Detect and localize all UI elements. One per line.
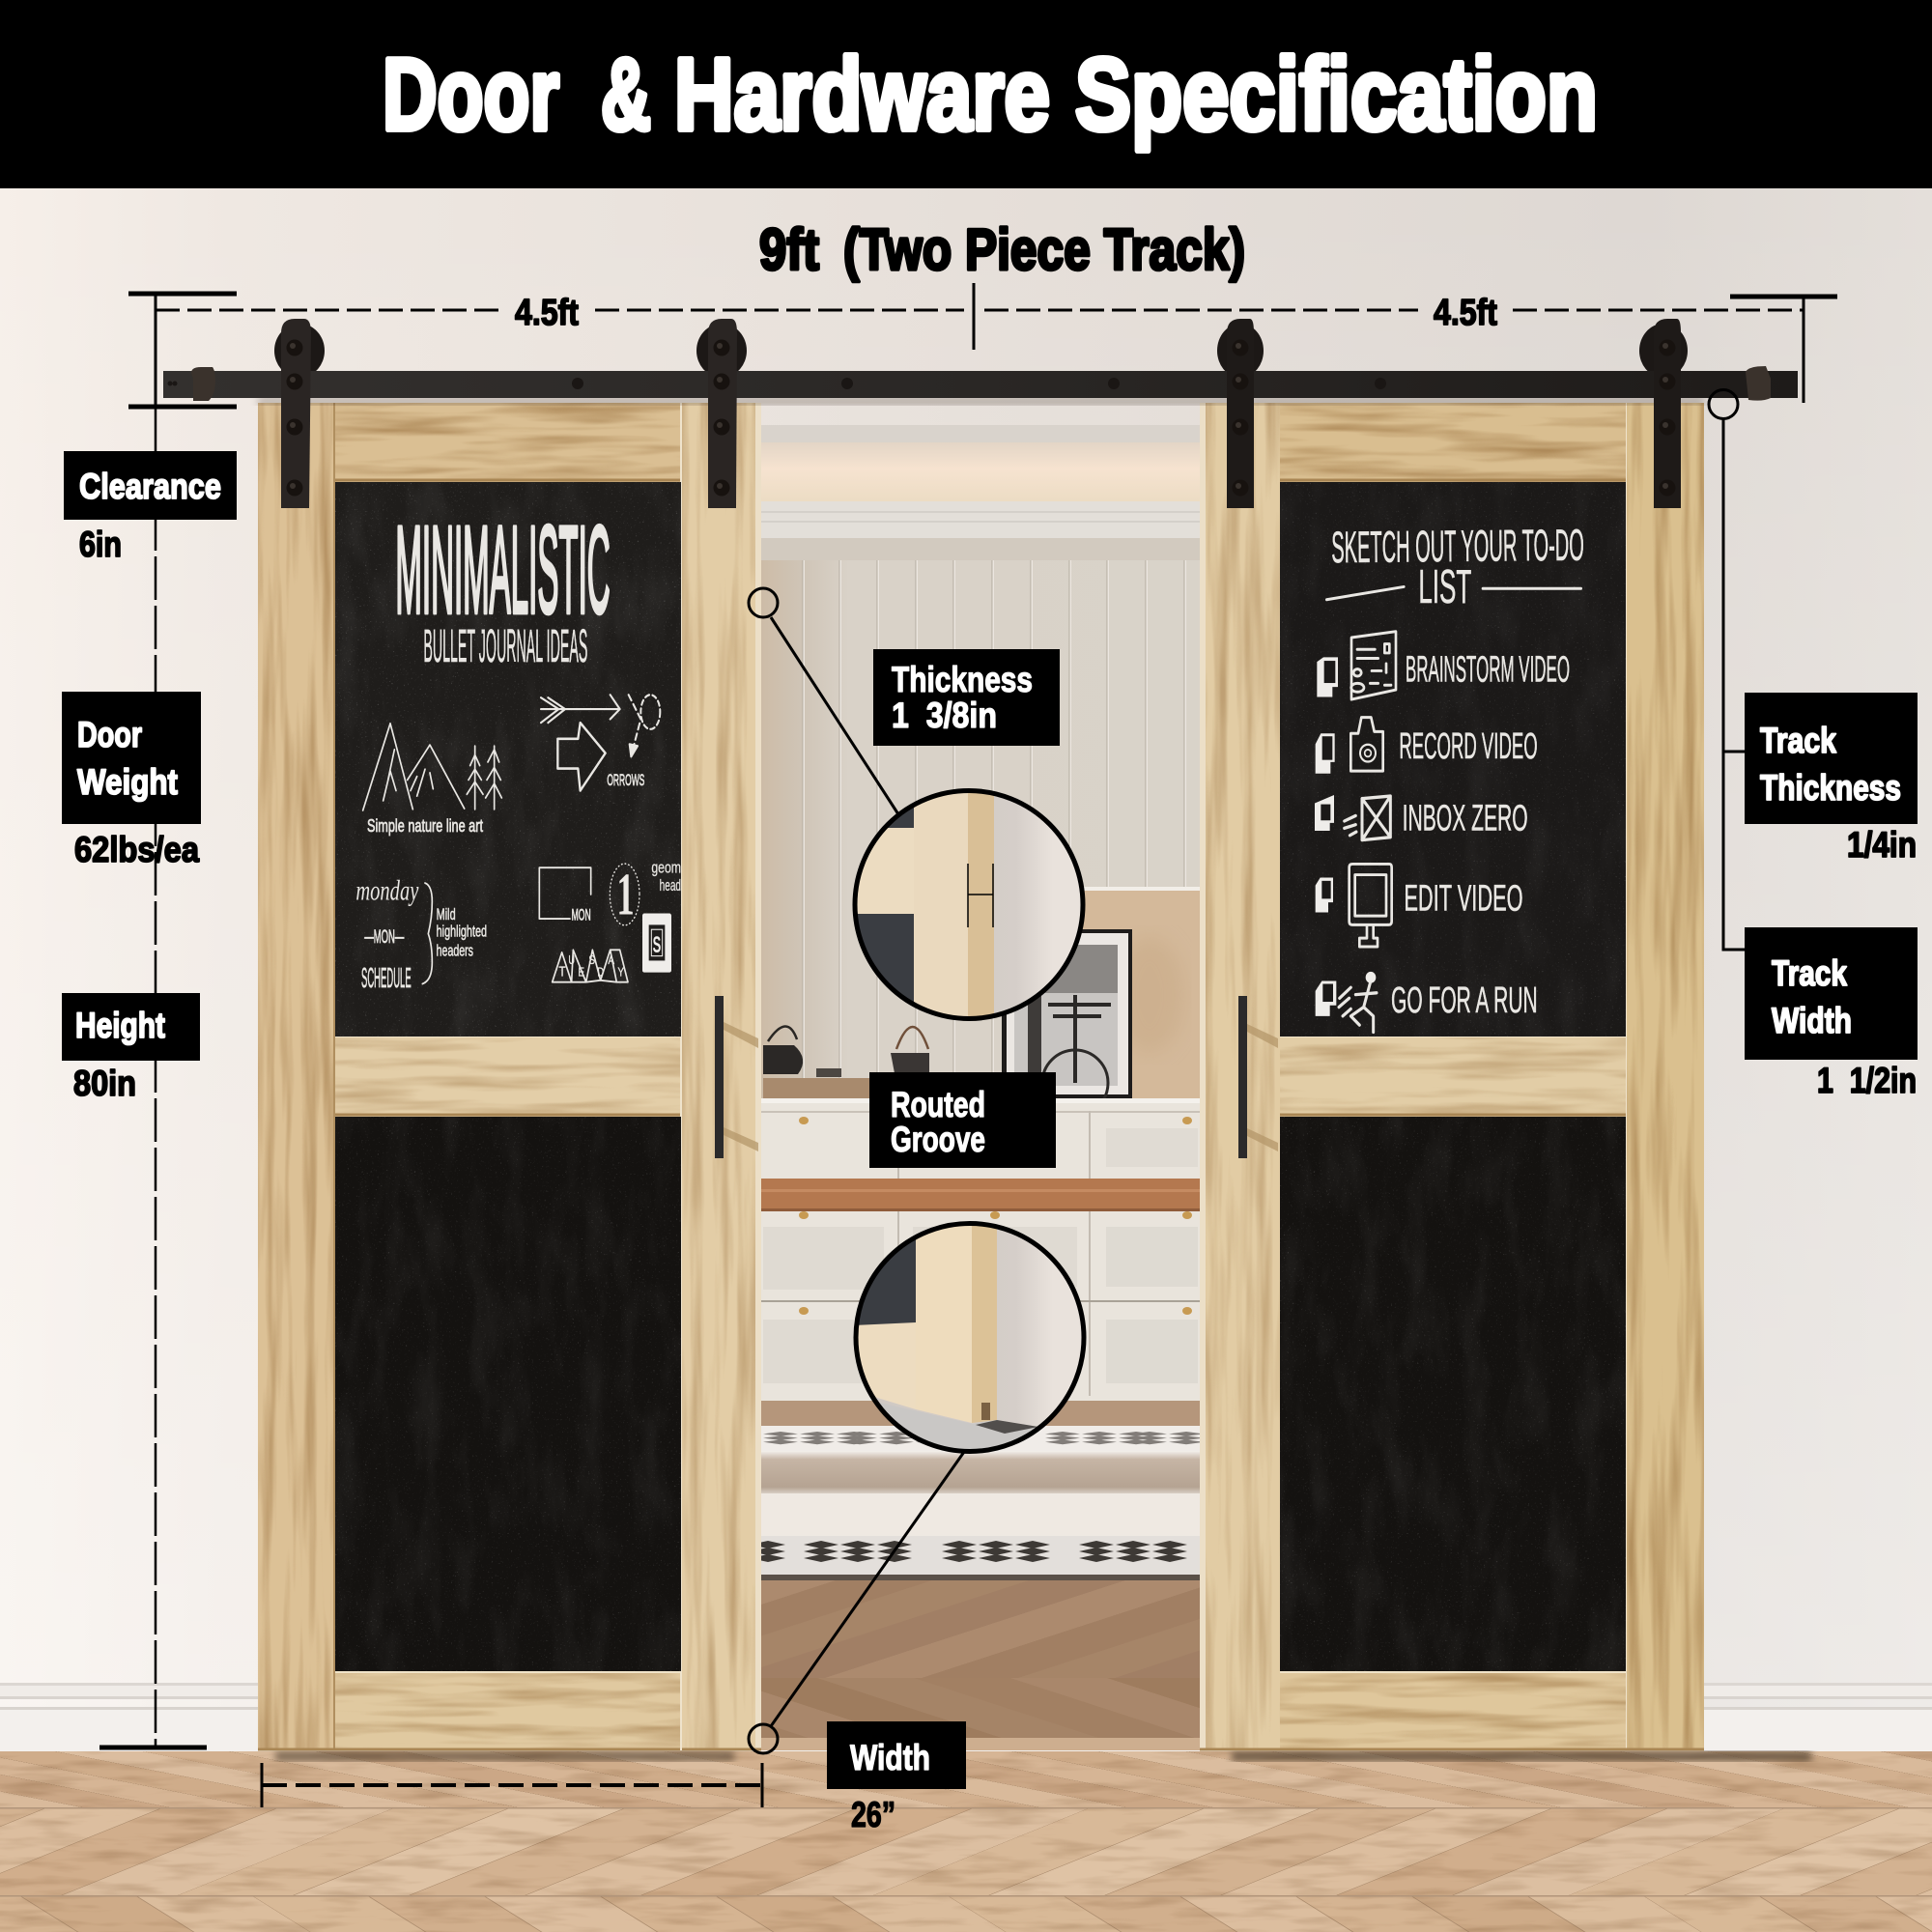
thickness label: 1 3/8in: [892, 696, 997, 735]
to-do row: record video: RECORD VIDEO: [1399, 724, 1538, 767]
door weight label: [62, 692, 201, 869]
track thickness label: Track: [1760, 721, 1836, 760]
TUESDAY bunting: [553, 950, 628, 982]
TUESDAY bunting: Y: [617, 965, 624, 980]
magnifier: door thickness: [855, 790, 1085, 1019]
thickness marks: [968, 864, 993, 927]
title: [383, 38, 1598, 152]
width label: Width: [850, 1738, 930, 1777]
track length heading: 9ft: [759, 217, 819, 282]
track end stops: [191, 366, 1771, 401]
routed groove label: [869, 1072, 1056, 1168]
track thickness label: 1/4in: [1847, 825, 1917, 865]
TUESDAY bunting: T: [558, 963, 566, 980]
lower chalkboard panel: [1280, 1117, 1626, 1671]
geometric headers note: geom: [651, 859, 681, 877]
dotted numeral: [610, 861, 639, 927]
title: &: [601, 38, 651, 152]
door pull handle: [715, 996, 758, 1158]
upper chalkboard panel: [335, 482, 681, 1037]
floor shadows under doors: [275, 1751, 1811, 1761]
S stamp: S: [653, 931, 661, 957]
chalk monday lettering: monday: [355, 875, 419, 907]
right barn door: [1200, 403, 1704, 1750]
track width label: Width: [1772, 1001, 1852, 1040]
chalk LIST heading: LIST: [1418, 560, 1471, 613]
TUESDAY bunting: D: [597, 965, 604, 980]
routed groove label: Routed: [891, 1085, 985, 1124]
lintel and ceiling glow: [761, 425, 1200, 560]
mountains and trees sketch: [363, 724, 501, 810]
chalk LIST heading: [1326, 560, 1581, 613]
hanger straps: [281, 319, 1681, 508]
width label: [827, 1721, 966, 1834]
to-do row: inbox zero: [1315, 795, 1528, 840]
4.5ft left label: 4.5ft: [515, 293, 579, 333]
TUESDAY bunting: S: [588, 953, 595, 967]
track shadow: [258, 398, 1704, 405]
roller wheels: [274, 324, 1688, 378]
callout pointer lines: [749, 588, 964, 1753]
title: Door: [383, 38, 559, 152]
chalk drawings: to-do list: BRAINSTORM VIDEO: [1406, 648, 1570, 690]
boxed MON: [539, 867, 591, 924]
brass knobs: [799, 1117, 1192, 1315]
to-do row: go for a run: GO FOR A RUN: [1391, 979, 1538, 1021]
highlighted headers note: highlighted: [437, 923, 487, 941]
boxed MON: MON: [572, 906, 591, 924]
stiles: [258, 403, 761, 1750]
infographic canvas: MINIMALISTIC: [395, 500, 611, 639]
4.5ft right label: 4.5ft: [1434, 293, 1497, 333]
door weight label: Weight: [77, 762, 178, 802]
chalk drawings: bullet journal: [355, 500, 681, 994]
chalk MON lettering: —MON—: [364, 925, 405, 947]
door weight label: Door: [77, 715, 142, 754]
barn door track: [163, 371, 1798, 398]
highlighted headers note: Mild: [437, 905, 456, 923]
width label: 26”: [851, 1795, 895, 1834]
title: Specification: [1075, 38, 1598, 152]
arrows caption: ORROWS: [607, 771, 644, 789]
chalk drawings: bullet journal: SCHEDULE: [361, 962, 412, 994]
thickness label: Thickness: [892, 660, 1033, 699]
TUESDAY bunting: E: [578, 965, 584, 980]
to-do row: go for a run: [1316, 972, 1538, 1033]
arrows sketch: [541, 695, 660, 791]
chalk drawings: to-do list: [1315, 521, 1584, 1033]
framed bicycle photo: [1002, 929, 1132, 1116]
TUESDAY bunting: U: [568, 953, 575, 967]
title: Hardware: [674, 38, 1050, 152]
wood counter: [761, 1179, 1200, 1211]
brace: [422, 883, 432, 984]
clearance label: 6in: [79, 525, 122, 564]
to-do row: edit video: [1316, 864, 1523, 947]
geometric headers note: [651, 859, 681, 895]
interior room through opening: [761, 425, 1200, 1750]
parquet floor: [0, 1751, 1932, 1932]
track width label: Track: [1772, 953, 1847, 993]
rails: [258, 403, 761, 1750]
stiles: [1200, 403, 1704, 1750]
track thickness label: Thickness: [1760, 768, 1901, 808]
cabinets: [761, 1098, 1200, 1401]
door width dimension: [262, 1763, 762, 1807]
S stamp: [642, 914, 671, 973]
magnifier: routed groove: [850, 1222, 1085, 1459]
to-do row: inbox zero: INBOX ZERO: [1403, 797, 1528, 838]
door pull handle: [1238, 996, 1278, 1158]
upper chalkboard panel: [1280, 482, 1626, 1037]
to-do row: edit video: EDIT VIDEO: [1404, 877, 1523, 919]
kettles and board: [763, 1026, 929, 1101]
room floor: [761, 1401, 1200, 1751]
rails: [1200, 403, 1704, 1750]
highlighted headers note: headers: [437, 942, 473, 960]
track length heading: (Two Piece Track): [843, 217, 1245, 282]
clearance label: [64, 451, 237, 564]
door weight label: 62lbs/ea: [74, 830, 199, 869]
to-do row: record video: [1316, 718, 1538, 774]
track thickness label: [1745, 693, 1918, 865]
panelled wall: [761, 560, 1200, 1101]
track callout lines: [1709, 390, 1745, 950]
height dimension line: [99, 409, 207, 1747]
upper chalkboard panel: SKETCH OUT YOUR TO-DO: [1331, 521, 1584, 573]
height label: 80in: [73, 1064, 136, 1103]
height label: [62, 993, 200, 1103]
track width label: [1745, 927, 1918, 1100]
height label: Height: [75, 1006, 165, 1045]
mountains caption: Simple nature line art: [367, 815, 483, 836]
left barn door: [258, 403, 761, 1750]
routed groove label: Groove: [891, 1120, 985, 1159]
TUESDAY bunting: A: [608, 953, 614, 967]
highlighted headers note: [437, 905, 487, 960]
header bar: [0, 0, 1932, 188]
geometric headers note: head: [660, 877, 681, 895]
track dimension lines: [128, 283, 1837, 407]
backsplash: [1082, 887, 1200, 1098]
rug: [761, 1432, 1200, 1580]
dotted numeral: 1: [616, 861, 635, 927]
clearance label: Clearance: [79, 467, 221, 506]
lower chalkboard panel: [335, 1117, 681, 1671]
chalk drawings: bullet journal: BULLET JOURNAL IDEAS: [423, 620, 587, 672]
to-do row: brainstorm video: [1317, 632, 1570, 699]
strap bolts: [286, 340, 1675, 497]
thickness label: [873, 649, 1060, 746]
